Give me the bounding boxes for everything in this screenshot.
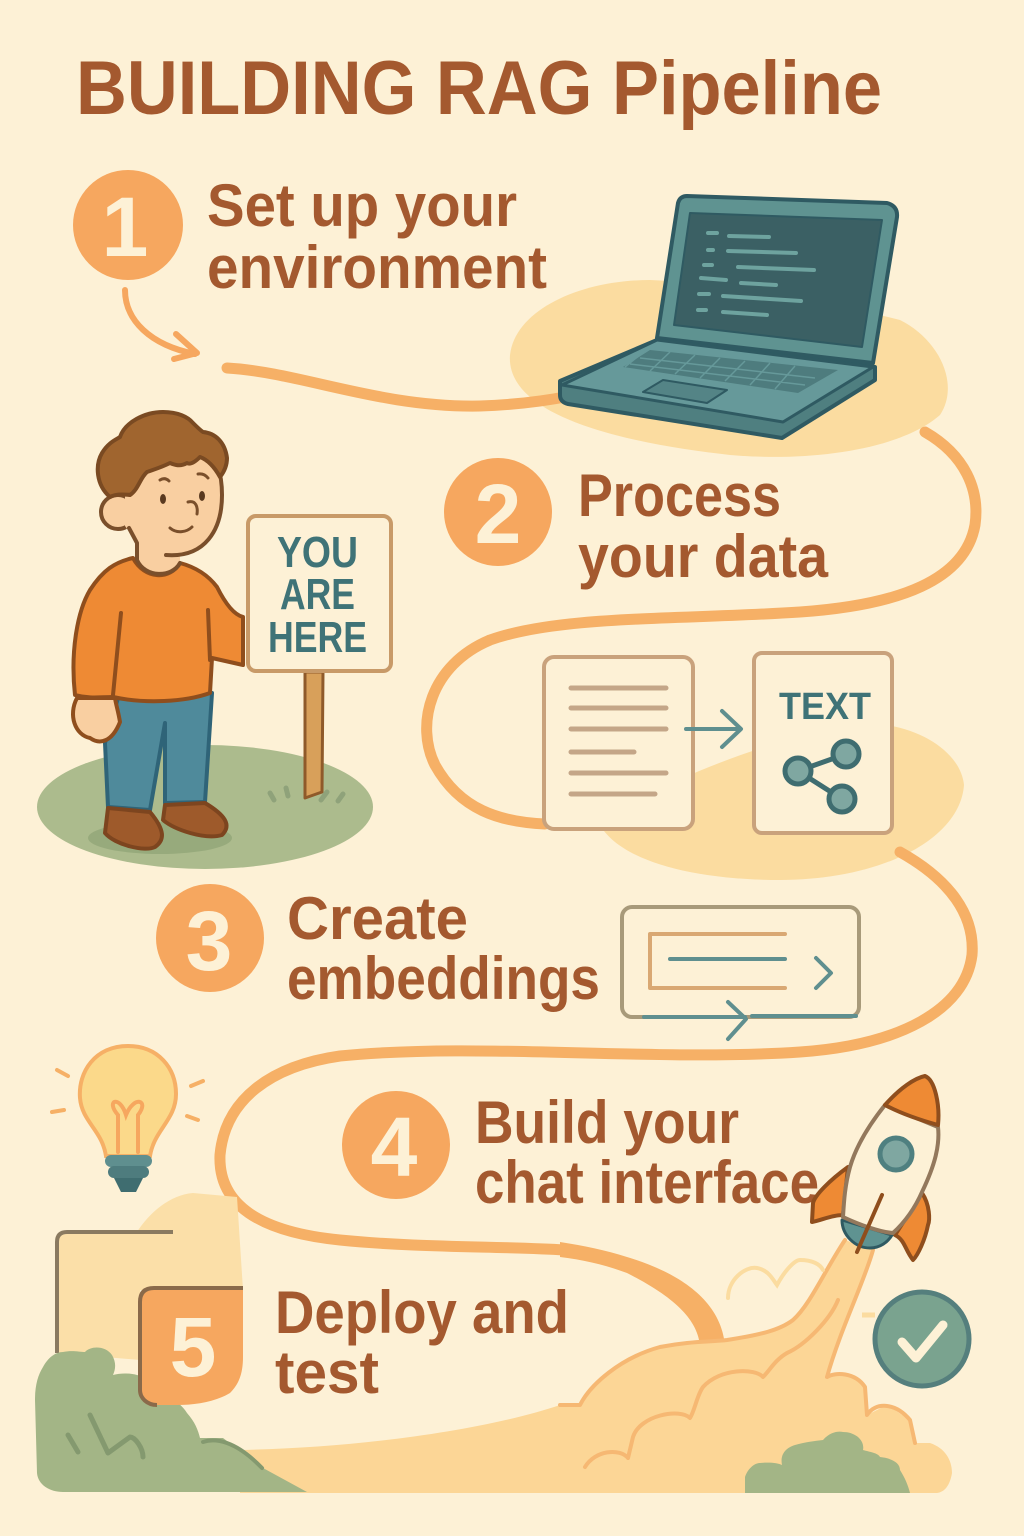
- step 1: badge: [73, 170, 183, 280]
- sign text: ARE: [280, 570, 355, 619]
- icon: text card: [754, 653, 892, 833]
- bush: lower right: [745, 1432, 910, 1493]
- sign text: HERE: [268, 613, 367, 662]
- legs: [105, 693, 212, 810]
- step 5: label: test: [275, 1339, 379, 1406]
- step 1: label: environment: [207, 234, 547, 301]
- step 5: badge: [140, 1287, 243, 1405]
- title: BUILDING RAG Pipeline: [76, 46, 882, 131]
- winding path: [220, 368, 976, 1345]
- shoes: [105, 808, 162, 849]
- step 3: label: [287, 885, 600, 1012]
- illustration: rocket: [812, 1076, 938, 1260]
- icon: document: [544, 657, 693, 829]
- step 4: label: chat interface: [475, 1149, 819, 1216]
- sign text: [268, 528, 367, 662]
- nose cone: [885, 1076, 938, 1125]
- plume and cloud outlines: [560, 1240, 915, 1467]
- blob: behind laptop: [510, 280, 948, 457]
- arrow: step 1 to path: [125, 290, 197, 359]
- sweater seams: [113, 610, 210, 695]
- illustration: smoke cloud ground: [240, 1240, 952, 1493]
- fins: [812, 1167, 848, 1222]
- step 4: badge: [342, 1091, 450, 1199]
- ear: [101, 495, 135, 529]
- step 1: badge: 1: [102, 180, 148, 274]
- sign post: [305, 672, 323, 798]
- arrow: document to text: [686, 711, 741, 747]
- nozzle: [842, 1220, 892, 1248]
- small cloud outline: [728, 1260, 823, 1298]
- step 4: badge: 4: [371, 1100, 418, 1194]
- sweater: [73, 558, 243, 701]
- step 5: label: Deploy and: [275, 1279, 569, 1346]
- hair: [98, 412, 227, 497]
- step 2: label: your data: [578, 523, 829, 590]
- step 5: label: [275, 1279, 569, 1406]
- illustration: back panel with cloud: [57, 1193, 243, 1360]
- sign board: [248, 516, 391, 671]
- icon: light bulb: [52, 1046, 203, 1192]
- step 2: label: [578, 462, 829, 590]
- step 2: label: Process: [578, 462, 781, 529]
- step 5: badge: 5: [170, 1300, 216, 1394]
- face details: [160, 474, 208, 532]
- step 2: badge: [444, 458, 552, 566]
- blob: behind text card: [600, 723, 964, 880]
- plume and cloud fill: [240, 1240, 952, 1493]
- step 4: label: Build your: [475, 1089, 739, 1156]
- step 2: badge: 2: [475, 467, 521, 561]
- body: [843, 1105, 938, 1233]
- sign text: YOU: [277, 528, 358, 577]
- face outline: [129, 445, 222, 574]
- icon: text card: TEXT: [779, 686, 871, 728]
- step 3: badge: 3: [186, 894, 232, 988]
- step 3: label: Create: [287, 885, 468, 952]
- centre line: [857, 1195, 882, 1252]
- window: [880, 1138, 912, 1170]
- icon: laptop: [560, 196, 897, 438]
- hand: [73, 698, 120, 741]
- step 1: label: [207, 172, 547, 301]
- bush: lower left: [35, 1347, 307, 1492]
- grass marks: [270, 788, 343, 801]
- icon: embedding input box: [622, 907, 859, 1039]
- step 1: label: Set up your: [207, 172, 517, 239]
- foot shadow: [88, 822, 232, 854]
- ground: [37, 745, 373, 869]
- icon: check mark badge: [862, 1292, 969, 1386]
- step 4: label: [475, 1089, 819, 1216]
- illustration: child with sign: [37, 412, 391, 869]
- face fill: [125, 445, 222, 574]
- step 3: badge: [156, 884, 264, 992]
- step 3: label: embeddings: [287, 945, 600, 1012]
